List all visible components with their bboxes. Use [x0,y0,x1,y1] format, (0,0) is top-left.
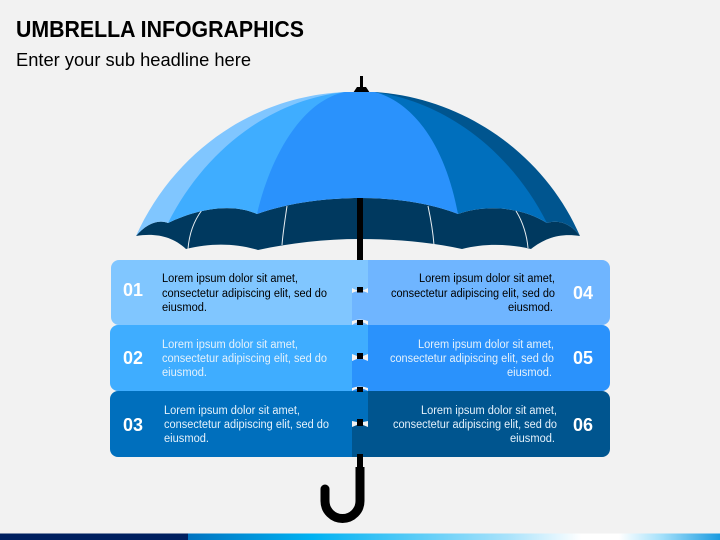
text 06 [393,405,557,445]
text 02 [162,339,327,379]
canopy ribs [188,206,528,249]
text 06: consectetur adipiscing elit, sed do [393,419,557,431]
text 04 [391,273,555,314]
title: UMBRELLA INFOGRAPHICS [16,16,304,42]
panel 06 [352,391,610,457]
panel 03 [110,391,368,457]
panel 04 [352,260,610,325]
number 05: 05 [573,347,593,368]
text 01: eiusmod. [162,302,207,314]
shaft [357,198,363,260]
number 01: 01 [123,279,143,300]
text 02: eiusmod. [162,367,207,379]
canopy panel: mid left [168,92,360,223]
text 06: eiusmod. [510,433,555,445]
ferrule [353,76,370,93]
text 04: consectetur adipiscing elit, sed do [391,288,555,300]
number 04: 04 [573,282,594,303]
umbrella [136,76,580,260]
text 04: Lorem ipsum dolor sit amet, [419,273,555,285]
footer bar [0,534,720,540]
underside of canopy [136,198,580,250]
text 03: Lorem ipsum dolor sit amet, [164,405,300,417]
text 05: Lorem ipsum dolor sit amet, [418,339,554,351]
panel 02 [110,325,368,391]
subtitle: Enter your sub headline here [16,50,251,70]
canopy panel: dark far right [375,92,580,236]
text 06: Lorem ipsum dolor sit amet, [421,405,557,417]
text 02: consectetur adipiscing elit, sed do [162,353,327,365]
canopy panel: mid right [360,92,547,223]
canopy panel: light left [136,92,345,236]
text 02: Lorem ipsum dolor sit amet, [162,339,298,351]
panel 01 [111,260,368,325]
text 03: consectetur adipiscing elit, sed do [164,419,329,431]
umbrella handle [320,454,363,518]
number 03: 03 [123,414,143,435]
panel 05 [352,325,610,391]
number 06: 06 [573,414,593,435]
shaft segments through panels [352,287,368,427]
text 01 [162,273,327,314]
text 01: consectetur adipiscing elit, sed do [162,288,327,300]
text 03: eiusmod. [164,433,209,445]
text 05 [390,339,554,379]
number 02: 02 [123,347,143,368]
text 05: eiusmod. [507,367,552,379]
text 03 [164,405,329,445]
text 05: consectetur adipiscing elit, sed do [390,353,554,365]
text 04: eiusmod. [508,302,553,314]
canopy panel: centre [257,92,458,214]
text 01: Lorem ipsum dolor sit amet, [162,273,298,285]
